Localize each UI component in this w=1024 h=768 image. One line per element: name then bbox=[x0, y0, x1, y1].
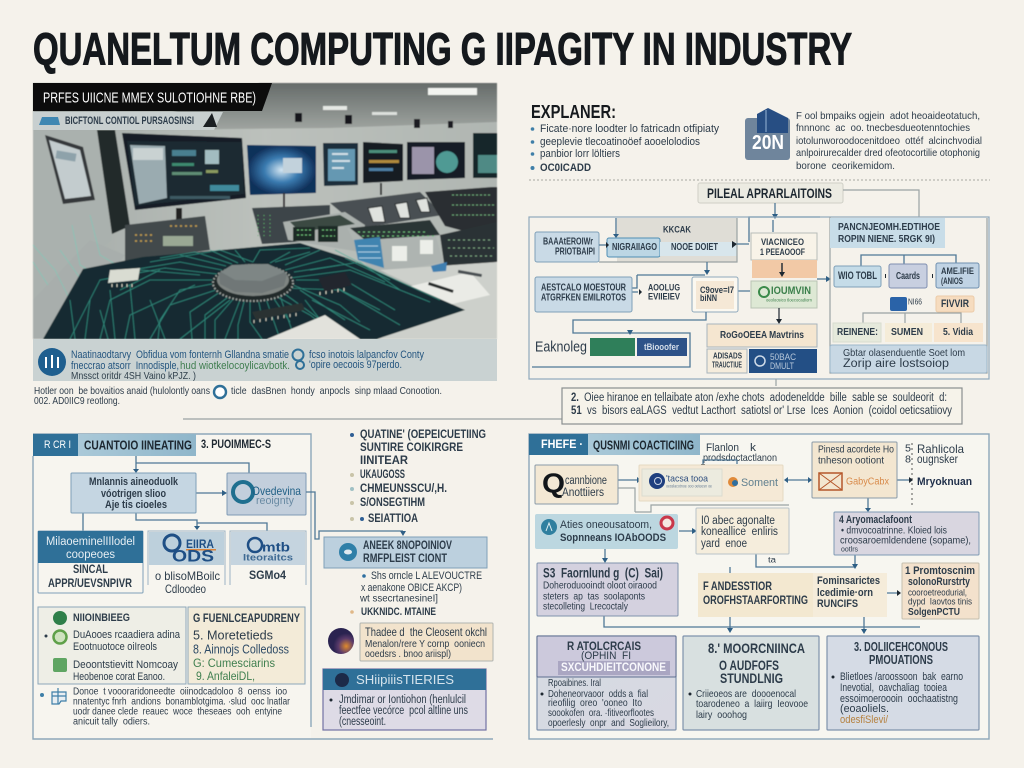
flow box: Viacnicieo bbox=[751, 233, 817, 260]
label: small tag: ta bbox=[768, 556, 777, 564]
box: Promtoscnim: 1 Promtoscnim bbox=[905, 565, 975, 577]
card: Atolcrcais bbox=[537, 636, 676, 730]
explainer bullets: Ficate·nore loodter lo fatricadn otfipiaty bbox=[540, 123, 719, 135]
icon and label: Ni66 bbox=[890, 297, 922, 311]
box: Malannis: Aje tis cioeles bbox=[105, 499, 167, 511]
card: Atolcrcais: R ATOLCRCAIS bbox=[567, 641, 641, 653]
bullet list: QUATINE' (OEPEICUETIING bbox=[360, 429, 486, 441]
box: Pinesd: tnheson ootiont bbox=[818, 456, 884, 466]
photo footnote: Hotler oon be bovaitios anaid (hulolontly oans bbox=[34, 385, 210, 397]
bullet list bbox=[350, 429, 486, 525]
sub panel heading: ROPIN NIENE. 5RGK 9I) bbox=[838, 233, 935, 245]
photo caption band bbox=[33, 339, 497, 382]
flow text: Aoolug Eviiev bbox=[648, 282, 681, 302]
section header: CUANTOIO IINEATING bbox=[84, 438, 192, 452]
box: Shipuistieries bbox=[323, 669, 486, 730]
box: Promtoscnim: cooroetreodurial, bbox=[908, 588, 967, 598]
flow box: green logo: IOUMVIN bbox=[771, 285, 811, 297]
box: Fivvir: FIVVIR bbox=[941, 298, 969, 310]
flow box: Baaaterohw: BAAAtEROIWr bbox=[543, 236, 593, 248]
box: S3 Faornlund: steters ap tas soolaponts bbox=[543, 592, 645, 602]
footnote with icon: uodr danee clede reauec woce theseaes ooh entyine bbox=[73, 706, 282, 718]
section header: FHEFE · bbox=[541, 439, 583, 451]
explainer paragraph: borone ceorikemidom. bbox=[796, 160, 895, 172]
flow box: blue logo: 50BAC bbox=[770, 352, 796, 362]
flow box: Coover: C9ove=l7 bbox=[700, 285, 734, 295]
box: Reinene: REINENE: bbox=[837, 326, 878, 338]
box: Malannis: Mnlannis aineoduolk bbox=[89, 476, 179, 488]
box: Niioinbieeg list: Deoontstievitt Nomcoay bbox=[73, 659, 178, 671]
card: Dolihcehconous: essoimoeroooin oochaatistng bbox=[840, 693, 958, 705]
box: Niioinbieeg list: DuAooes rcaadiera adina bbox=[73, 629, 181, 641]
row dots bbox=[885, 274, 933, 278]
box: Aneeka heading: RMFPLEIST CIONT bbox=[363, 551, 448, 565]
bullets under heading bbox=[350, 570, 482, 618]
box: Fuenl list: G: Cumesciarins bbox=[193, 656, 275, 670]
box: Thadee peach: ooedsrs . bnoo ariispl) bbox=[365, 648, 451, 660]
flow box: blue logo bbox=[749, 349, 817, 373]
card: Atolcrcais: rieofilig oreo 'ooneo Ito bbox=[548, 697, 642, 709]
footnote with icon: anicuit tally odiers. bbox=[73, 716, 150, 728]
card: Moorcniinca: 8.' MOORCNIINCA bbox=[708, 640, 805, 656]
bullets under heading: Shs orncle L ALEVOUCTRE bbox=[371, 570, 482, 582]
card: Emtb: SGMo4 bbox=[249, 570, 287, 582]
box: Aryomaclafoont: 4 Aryomaclafoont bbox=[839, 514, 912, 526]
box: Roabec bbox=[696, 508, 789, 554]
photo footnote: 002. AD0IIC9 reotlong. bbox=[34, 395, 120, 407]
box: S3 Faornlund bbox=[537, 563, 678, 616]
card: Dolihcehconous: odesfiSlevi/ bbox=[840, 714, 889, 726]
card: Dolihcehconous: (eoaoliels. bbox=[840, 703, 889, 715]
label: Flanlon: k bbox=[750, 442, 757, 454]
box: Aneeka heading bbox=[324, 537, 487, 568]
box: F Andesstior bbox=[698, 573, 887, 617]
box: S3 Faornlund: S3 Faornlund g (C) Sai) bbox=[543, 566, 663, 580]
card: Moorcniinca: STUNDLNIG bbox=[720, 670, 783, 686]
box: Thadee peach: Thadee d the Cleosent okchl bbox=[365, 625, 487, 639]
box: Aties: Aties oneousatoom, bbox=[560, 519, 652, 531]
flow box: Coover: biNN bbox=[700, 293, 717, 303]
panel: control room photo bbox=[33, 83, 497, 407]
icon: 20N badge: 20N bbox=[752, 132, 784, 154]
bullets under heading: wt ssecrtanesineI] bbox=[359, 594, 438, 604]
card: Eiira Ods: o blisoMBoilc bbox=[155, 569, 220, 583]
box: logos: 'tacsa tooa bbox=[666, 474, 709, 484]
bullet list: CHMEUNSSCU/,H. bbox=[360, 483, 447, 495]
bullet list: SEIATTIOA bbox=[368, 513, 418, 525]
box: logos: Soment bbox=[741, 477, 778, 489]
text: Rahlicola bbox=[905, 442, 972, 488]
box: Niioinbieeg list bbox=[38, 607, 186, 684]
box: Aryomaclafoont: croosaroemldendene (sopame), bbox=[840, 536, 971, 546]
photo footnote bbox=[34, 385, 442, 407]
panel: quantine list column bbox=[306, 429, 493, 730]
flow box: Nigraiago: NIGRAIIAGO bbox=[612, 242, 657, 253]
box: F Andesstior: F ANDESSTIOR bbox=[703, 581, 773, 593]
note band: Zorip aire lostsoiop bbox=[843, 358, 949, 370]
bullets under heading: x aenakone OBICE AKCP) bbox=[361, 582, 462, 594]
card: Milanemiel: SINCAL bbox=[73, 564, 108, 576]
flow box: Adisads: ADISADS bbox=[713, 352, 743, 360]
explainer paragraph: fnnnonc ac oo. tnecbesdueotenntochies bbox=[796, 122, 970, 134]
photo header black: PRFES UIICNE MMEX SULOTIOHNE RBE) bbox=[43, 90, 256, 106]
note band: Gbtar olasenduentle Soet lom bbox=[843, 347, 965, 359]
flow box: Coover bbox=[692, 277, 738, 312]
box: Fuenl list: G FUENLCEAPUDRENY bbox=[193, 611, 300, 625]
flow box: Adisads bbox=[707, 349, 747, 373]
box: Aryomaclafoont: ootlrs bbox=[841, 546, 858, 554]
section header: 3. PUOIMMEC-S bbox=[201, 439, 271, 451]
text: Rahlicola: 8 bbox=[905, 454, 911, 466]
callout: 2. Oiee hiranoe en tellaibate aton /exhe chots adodeneldde bille sable se souldeorit d: bbox=[571, 392, 947, 404]
card: Emtb bbox=[230, 531, 306, 585]
box: Sumen bbox=[885, 323, 932, 342]
photo caption band: fneccrao atsorr Innodisple, bbox=[71, 360, 179, 372]
panel: pipeline flow bbox=[529, 183, 989, 379]
box: Pinesd bbox=[812, 442, 897, 498]
bullet list: IINITEAR bbox=[360, 455, 409, 467]
box: Ame.ifie: AME.IFIE bbox=[941, 266, 974, 276]
box: logos bbox=[639, 465, 783, 501]
label: Flanlon: Flanlon bbox=[706, 442, 739, 454]
explainer heading: EXPLANER: bbox=[531, 102, 616, 122]
box: Ovedevina logo: Ovedevina bbox=[252, 484, 301, 498]
photo scene bbox=[33, 83, 497, 339]
box: F Andesstior: OROFHSTAARFORTING bbox=[703, 595, 808, 607]
flow box: Nooe Doiet: NOOE DOIET bbox=[671, 242, 718, 253]
flow box: green logo: oeoloosico tloecocadiorn bbox=[766, 298, 812, 302]
box: Ame.ifie: (ANIOS bbox=[941, 276, 963, 286]
callout bbox=[183, 379, 962, 424]
card: Milanemiel bbox=[38, 531, 143, 593]
photo caption band: fcso inotois lalpancfov Conty bbox=[309, 349, 424, 361]
card: Atolcrcais: opoerlesly onpr and Soglieilory, bbox=[548, 717, 669, 729]
box: Wio Tobl bbox=[834, 266, 881, 287]
box: Sumen: SUMEN bbox=[891, 326, 923, 338]
flow box: Adisads: TRAUCTIUE bbox=[712, 360, 742, 370]
section header: R CR I bbox=[44, 439, 71, 451]
explainer paragraph: iotolunworoodocenitdoeo ottéf alcinchvodial bbox=[796, 135, 982, 147]
sub panel heading bbox=[830, 218, 945, 248]
box: Aties bbox=[535, 514, 678, 549]
box: Malannis bbox=[71, 473, 196, 513]
panel: quantum left bbox=[33, 434, 493, 739]
icon: globe bbox=[328, 628, 354, 654]
flow box: Rogooea Mavtrins: RoGoOEEA Mavtrins bbox=[720, 329, 804, 341]
box: Fivvir bbox=[936, 296, 974, 312]
section header bbox=[33, 434, 271, 456]
left flow grey header bbox=[617, 218, 737, 262]
card: Dolihcehconous: PMOUATIONS bbox=[869, 653, 933, 667]
text: Rahlicola: ougnsker bbox=[917, 454, 958, 466]
flow box: Rogooea Mavtrins bbox=[707, 324, 817, 347]
box: Promtoscnim: solonoRurstrty bbox=[908, 576, 971, 588]
flow box: Aestcalo: ATGRFKEN EMILROTOS bbox=[541, 292, 626, 304]
card: Atolcrcais: Rpoaibines. Iral bbox=[548, 677, 601, 689]
card: Eiira Ods: ODS bbox=[172, 546, 214, 566]
flow box: Viacnicieo: VIACNICEO bbox=[761, 237, 804, 247]
box: Qannbione: cannbione bbox=[565, 475, 607, 487]
panel: quantum coaching right bbox=[529, 434, 989, 739]
box: Niioinbieeg list: NIIOINBIEEG bbox=[73, 612, 130, 624]
box: Roabec: yard enoe bbox=[701, 538, 747, 550]
card: Emtb: mtb bbox=[262, 540, 290, 554]
flow arrows left bbox=[599, 218, 750, 295]
note band bbox=[830, 345, 987, 373]
flow arrow to right panel bbox=[776, 276, 831, 324]
connectors bbox=[83, 456, 267, 531]
photo footnote: ticle dasBnen hondy anpocls sinp mlaad Conootion. bbox=[231, 385, 442, 397]
right sub panel bbox=[830, 217, 987, 373]
box: Shipuistieries: Jmdimar or Iontiohon (henlulcil bbox=[339, 694, 466, 706]
flow box: Baaaterohw bbox=[535, 232, 599, 262]
photo caption band: hud wiotkelocoylicavbotk. bbox=[180, 360, 290, 372]
box: Ovedevina logo bbox=[227, 473, 306, 515]
box: Qannbione: Anottiiers bbox=[562, 487, 604, 499]
section header: QUSNMI COACTICIING bbox=[593, 438, 694, 452]
flow connectors bbox=[529, 190, 989, 379]
explainer bullets: panbior lorr löltiers bbox=[540, 148, 620, 160]
box: Promtoscnim bbox=[902, 563, 979, 619]
flow outline of top row bbox=[599, 218, 737, 262]
flow box: Viacnicieo: 1 PEEAOOOF bbox=[760, 247, 805, 257]
box: Malannis: vóotrigen slioo bbox=[101, 488, 166, 500]
box: Ame.ifie bbox=[936, 263, 979, 288]
box: S3 Faornlund: stecolleting Lrecoctaly bbox=[543, 602, 628, 612]
box: F Andesstior: lcedimie·orn bbox=[817, 587, 873, 599]
flow box: Nooe Doiet bbox=[660, 242, 737, 256]
card: Moorcniinca: O AUDFOFS bbox=[719, 657, 779, 673]
box: Aneeka heading: ANEEK 8NOPOINIOV bbox=[363, 538, 452, 552]
flow text: Aoolug Eviiev: EVIIEIEV bbox=[648, 292, 681, 302]
photo caption band: 'opire oecoois 97perdo. bbox=[309, 359, 402, 371]
box: F Andesstior: Fominsarictes bbox=[817, 575, 880, 587]
card: Dolihcehconous bbox=[827, 636, 979, 730]
connector to amplification box bbox=[306, 492, 406, 539]
photo caption band: Mnssct oritdr 4SH Vaino kPJZ. ) bbox=[71, 370, 196, 382]
explainer bullets: OC0ICADD bbox=[540, 162, 591, 174]
box: Shipuistieries: (cnesseoint. bbox=[339, 716, 386, 728]
flow box: Aestcalo bbox=[535, 277, 632, 312]
flow box: orange step bbox=[752, 260, 817, 278]
card: Dolihcehconous: 3. DOLIICEHCONOUS bbox=[854, 640, 948, 654]
explainer bullets: geeplevie tlecoatinoöef aooelolodios bbox=[540, 136, 700, 148]
box: Fuenl list: 9. AnfaleiDL, bbox=[196, 669, 255, 683]
card: Emtb: Iteoraitcs bbox=[243, 552, 293, 564]
card: Milanemiel: MilaoeminelIIlodel bbox=[46, 536, 135, 548]
icon: 20N badge bbox=[745, 108, 790, 160]
photo caption band: Naatinaodtarvy Obfidua vom fonternh Gllandna smatie bbox=[71, 349, 289, 361]
card: Eiira Ods bbox=[148, 531, 225, 596]
flow text: Aoolug Eviiev: AOOLUG bbox=[648, 282, 680, 294]
box: Thadee peach bbox=[360, 623, 493, 661]
box: Aties: Sopnneans IOAbOODS bbox=[560, 532, 666, 544]
box: Fuenl list: 5. Moretetieds bbox=[193, 628, 273, 642]
sub panel lower connectors bbox=[863, 313, 961, 323]
photo subheader bbox=[33, 112, 223, 130]
explainer paragraph bbox=[796, 110, 982, 172]
card: Atolcrcais: Doheneorvaoor odds a fial bbox=[548, 688, 648, 700]
box: logos: oesslacotnoe ooo oeteesn oe bbox=[666, 484, 712, 488]
bullet list: UKAUGOSS bbox=[360, 469, 405, 481]
box: Ovedevina logo: reoignty bbox=[256, 495, 294, 507]
flow heading bbox=[698, 183, 843, 203]
section header bbox=[529, 434, 700, 455]
flow box: blue logo: DMULT bbox=[770, 361, 794, 371]
explainer paragraph: F ool bmpaiks ogjein adot heoaideotatuch, bbox=[796, 110, 980, 122]
explainer bullets bbox=[530, 123, 719, 174]
card: Milanemiel: coopeoes bbox=[66, 549, 115, 561]
box: Reinene bbox=[833, 323, 881, 342]
panel: explainer bbox=[530, 102, 982, 174]
card: Eiira Ods: EIIRA bbox=[186, 537, 214, 551]
box: Qannbione bbox=[535, 465, 618, 504]
box: Cards bbox=[889, 264, 927, 288]
box: F Andesstior: RUNCIFS bbox=[817, 598, 858, 610]
card: Dolihcehconous: Blietloes /aroossoon bak earno bbox=[840, 671, 963, 683]
sub panel heading: PANCNJEOMH.EDTIHOE bbox=[838, 221, 940, 233]
left flow grey header: KKCAK bbox=[663, 224, 691, 236]
footnote with icon bbox=[40, 686, 291, 728]
connectors bbox=[602, 443, 920, 634]
box: Roabec: I0 abec agonalte bbox=[701, 515, 775, 527]
box: Vidia: 5. Vidia bbox=[943, 326, 973, 338]
box: Promtoscnim: dypd Iaovtos tinis bbox=[908, 596, 972, 608]
box: Niioinbieeg list: Eootnuotoce oiIreols bbox=[73, 641, 157, 653]
box: Fuenl list bbox=[188, 607, 305, 684]
box: Qannbione: Q bbox=[542, 468, 565, 498]
label: Flanlon bbox=[703, 442, 777, 464]
card: Atolcrcais: soookofen ora. ·fitiveorflootes bbox=[548, 707, 654, 719]
card: Atolcrcais: SXCUHDIEITCONONE bbox=[561, 662, 666, 674]
flow heading: PILEAL APRARLAITOINS bbox=[707, 185, 832, 201]
box: Shipuistieries: feectfee vecórce pcol altline uns bbox=[339, 705, 468, 717]
box: Aryomaclafoont: • dmvocoatrinne. Kloied lois bbox=[841, 526, 947, 536]
card: Moorcniinca: toarodeneo a laiirg Ieovooe bbox=[696, 698, 808, 710]
footnote with icon: Donoe t voooraridoneedte oiinodcadoloo 8 oenss ioo bbox=[73, 686, 287, 698]
sub panel connectors bbox=[861, 255, 956, 266]
flow legend: Eaknoleg: tBiooofer bbox=[644, 342, 679, 352]
text: Rahlicola: 5 bbox=[905, 444, 911, 454]
flow box: Aestcalo: AESTCALO MOESTOUR bbox=[541, 282, 627, 294]
text: Rahlicola: Rahlicola bbox=[917, 442, 964, 456]
photo subheader: BICFTONL CONTIOL PURSAOSINSI bbox=[65, 115, 194, 127]
box: Shipuistieries: SHiipiiisTIERIES bbox=[356, 673, 454, 687]
box: Cards: Caards bbox=[896, 270, 920, 282]
card: Eiira Ods: Cdloodeo bbox=[165, 582, 206, 596]
box: Promtoscnim: SolgenPCTU bbox=[908, 606, 960, 618]
flow box: green logo bbox=[751, 281, 817, 308]
box: Aryomaclafoont bbox=[834, 512, 979, 555]
flow box: Baaaterohw: PRIOTBAIPI bbox=[555, 246, 595, 258]
callout: 51 vs bisors eaLAGS vedtut Lacthort satiotsl or' Lrse Ices Aonion (coidol oeticsatiiovy bbox=[571, 405, 952, 417]
box: Pinesd: Pinesd acordete Ho bbox=[818, 444, 894, 456]
card: Milanemiel: APPR/UEVSNPIVR bbox=[48, 576, 132, 590]
box: S3 Faornlund: Doheroduooindt oloot oiraood bbox=[543, 580, 657, 592]
bullet list: S/ONSEGTIHM bbox=[360, 497, 425, 509]
bullet list: SUNTIRE COIKIRGRE bbox=[360, 442, 463, 454]
explainer paragraph: anlpoirurecalder dred ofeotocortilie otophonig bbox=[796, 147, 980, 159]
card: Dolihcehconous: Inevotial, oavchaliag tooiea bbox=[840, 682, 948, 694]
photo header black bbox=[33, 83, 272, 111]
flow box: Nigraiago bbox=[607, 238, 660, 257]
footnote with icon: nnatentyc fnrh andions bonamblotgima. ·slud ooc lnatlar bbox=[73, 696, 291, 708]
box: Wio Tobl: WIO TOBL bbox=[838, 270, 877, 282]
box: Niioinbieeg list: Heobenoe corat Eanoo. bbox=[73, 671, 165, 683]
icon and label: Ni66: NI66 bbox=[908, 298, 922, 306]
box: Thadee peach: Menalon/rere Y cornp ooniecn bbox=[365, 638, 485, 650]
card: Moorcniinca: Criieoeos are doooenocal bbox=[696, 688, 796, 700]
card: Moorcniinca: lairy ooohog bbox=[696, 709, 747, 721]
bullets under heading: UKKNIDC. MTAINE bbox=[361, 606, 436, 618]
flow legend: Eaknoleg: Eaknoleg bbox=[535, 338, 587, 356]
box: Roabec: koneallice enliris bbox=[701, 526, 778, 538]
label: Flanlon: prodsdoctactlanon bbox=[703, 452, 777, 464]
divider bbox=[529, 179, 990, 181]
text: Rahlicola: Mryoknuan bbox=[917, 476, 972, 488]
card: Moorcniinca bbox=[683, 636, 819, 730]
card: Atolcrcais: (OPHIN FI bbox=[581, 650, 631, 662]
box: Fuenl list: 8. Ainnojs Colledoss bbox=[193, 642, 289, 656]
box: Vidia bbox=[934, 323, 983, 342]
box: Pinesd: GabyCabx bbox=[846, 476, 889, 488]
flow legend: Eaknoleg bbox=[532, 312, 706, 367]
